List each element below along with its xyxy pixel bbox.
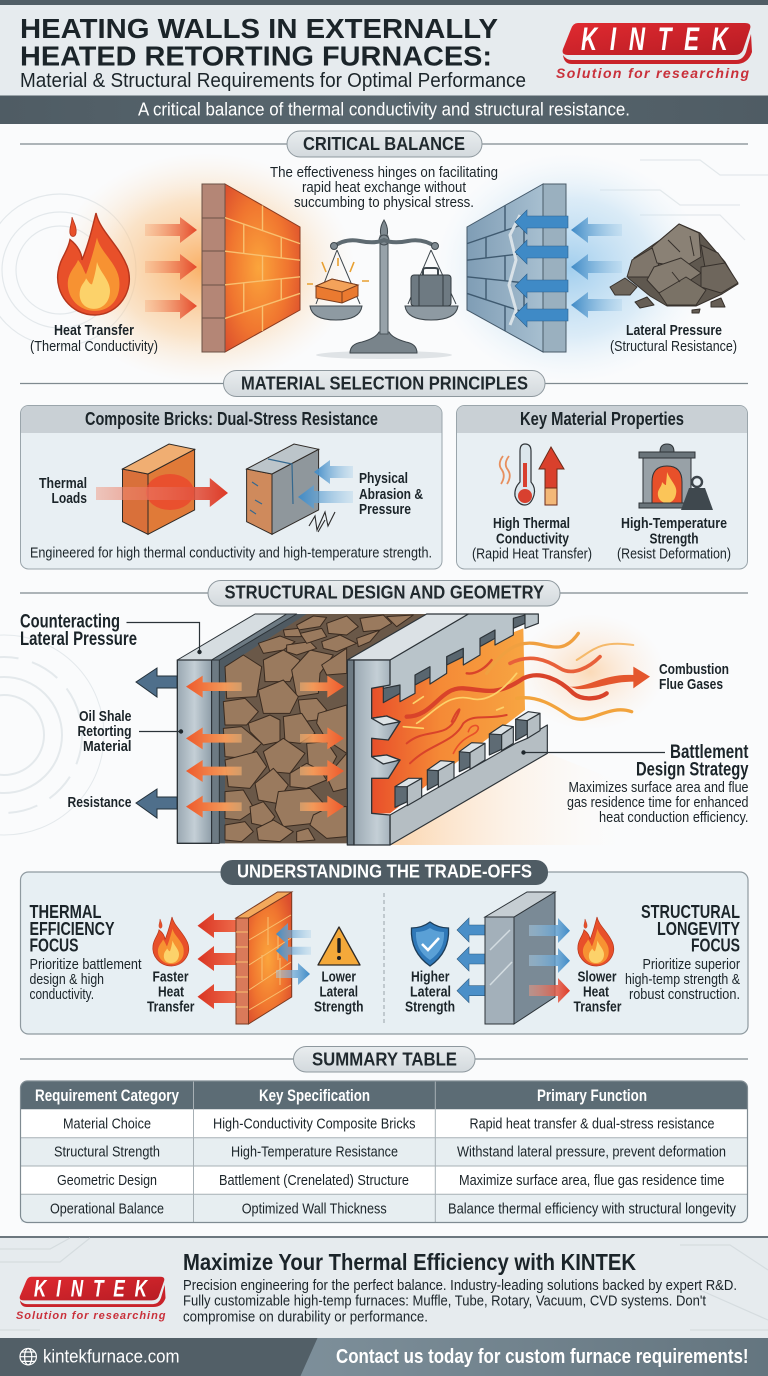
text: structural longevity focus	[625, 901, 741, 1003]
label: oil shale retorting material	[78, 708, 183, 755]
battlement wall: front face	[347, 660, 400, 845]
icon: flame	[153, 917, 189, 966]
label: thermal loads: Thermal	[39, 475, 87, 492]
heading: Key Material Properties	[520, 409, 684, 429]
section heading: structural design: STRUCTURAL DESIGN AND GEOMETRY	[224, 582, 545, 602]
weight case on pan	[411, 268, 451, 306]
label: higher lateral strength: Strength	[405, 998, 455, 1016]
title	[20, 13, 498, 72]
footer paragraph: Fully customizable high-temp furnaces: Muffle, Tube, Rotary, Vacuum, CVD systems. Don't	[183, 1293, 707, 1310]
text: thermal efficiency focus	[30, 901, 142, 1003]
label: lateral pressure	[610, 322, 737, 355]
bottom contact bar	[0, 1338, 768, 1376]
section heading: summary table: SUMMARY TABLE	[312, 1048, 457, 1070]
label: faster heat transfer: Heat	[158, 984, 184, 1000]
double arrows: lateral resistance	[186, 676, 344, 818]
label: lateral pressure: (Structural Resistance)	[610, 338, 737, 355]
label: thermal loads	[39, 475, 87, 507]
section heading: summary table	[20, 1046, 748, 1072]
label: heat transfer: (Thermal Conductivity)	[30, 338, 158, 355]
diagram: thin brick wall	[198, 892, 311, 1024]
panel: composite bricks	[20, 406, 442, 569]
section heading: critical balance: CRITICAL BALANCE	[303, 133, 465, 154]
decorative circuit background: top left	[0, 160, 768, 346]
table row: structural strength: Withstand lateral pressure, prevent deformation	[457, 1144, 726, 1161]
table row: operational balance	[50, 1200, 736, 1217]
label: higher lateral strength	[405, 968, 455, 1016]
arrows: pressure from rocks	[571, 217, 622, 318]
label: slower heat transfer: Heat	[583, 984, 609, 1000]
retort rock bed	[213, 614, 427, 843]
label: combustion flue gases	[659, 661, 729, 693]
table row: operational balance: Operational Balance	[50, 1200, 164, 1217]
label: thermal loads: Loads	[52, 490, 87, 507]
footer logo: KINTEK	[34, 1276, 149, 1302]
brick wall: hot side	[202, 184, 300, 352]
table header row: Key Specification	[259, 1087, 370, 1105]
icon: warning triangle	[318, 927, 360, 965]
label: high thermal conductivity: High Thermal	[493, 515, 570, 532]
intro text	[270, 164, 498, 211]
label: battlement design strategy: Battlement	[670, 742, 749, 763]
panel: structural design	[20, 612, 749, 845]
arrows: pressure in wall	[515, 210, 568, 327]
label: high temperature strength: Strength	[650, 530, 698, 548]
diagram: thick stone wall	[457, 892, 570, 1024]
section heading: material selection principles	[20, 370, 748, 396]
footer paragraph: compromise on durability or performance.	[183, 1308, 428, 1326]
label: faster heat transfer: Transfer	[147, 998, 195, 1016]
footer heading: Maximize Your Thermal Efficiency with KINTEK	[183, 1249, 636, 1275]
text: structural longevity focus: STRUCTURAL	[641, 901, 740, 922]
text: structural longevity focus: FOCUS	[691, 934, 740, 956]
panel: critical balance	[30, 153, 738, 383]
icon: shield	[411, 922, 449, 966]
table row: material choice: High-Conductivity Composite Bricks	[213, 1115, 416, 1132]
label: higher lateral strength: Lateral	[410, 984, 451, 1000]
label: oil shale retorting material: Retorting	[78, 723, 132, 740]
icon: thermometer and up arrow	[500, 444, 564, 505]
table header row: Primary Function	[537, 1087, 647, 1105]
heading pill: UNDERSTANDING THE TRADE-OFFS	[237, 860, 532, 882]
tagline band	[0, 96, 768, 124]
diagram: wall section	[177, 614, 650, 845]
heading: Composite Bricks: Dual-Stress Resistance	[85, 409, 378, 429]
section heading: critical balance	[20, 131, 748, 157]
label: slower heat transfer	[574, 968, 622, 1016]
top stripe	[0, 0, 768, 5]
intro text: rapid heat exchange without	[302, 179, 467, 196]
icon: flame	[58, 213, 129, 315]
icon: balance scale	[307, 220, 458, 359]
label: physical abrasion	[359, 470, 423, 518]
text: thermal efficiency focus: FOCUS	[30, 934, 78, 956]
battlement wall: upper crenels	[347, 614, 538, 703]
text: thermal efficiency focus: design & high	[30, 971, 104, 988]
label: high temperature strength: High-Temperature	[621, 515, 727, 532]
flue gas arrow	[570, 667, 650, 689]
label: heat transfer	[30, 322, 158, 355]
label: faster heat transfer	[147, 968, 195, 1016]
logo: KINTEK: Solution for researching	[556, 65, 749, 81]
footer logo	[16, 1276, 166, 1322]
icon: furnace and weight	[639, 444, 713, 510]
left wall	[177, 614, 297, 843]
label: combustion flue gases: Flue Gases	[659, 676, 723, 693]
table row: geometric design: Maximize surface area, flue gas residence time	[459, 1172, 724, 1189]
header	[0, 0, 768, 96]
section heading: material selection principles: MATERIAL SELECTION PRINCIPLES	[241, 372, 528, 394]
footer paragraph	[183, 1277, 737, 1326]
label: lower lateral strength	[314, 968, 364, 1016]
table header row	[35, 1087, 647, 1105]
label: high thermal conductivity: (Rapid Heat Transfer)	[472, 546, 592, 562]
table row: material choice: Material Choice	[63, 1115, 151, 1132]
battlement wall: flames	[403, 633, 633, 763]
text: thermal efficiency focus: EFFICIENCY	[30, 918, 115, 939]
icon: composite brick under pressure	[247, 444, 353, 534]
table row: material choice: Rapid heat transfer & dual-stress resistance	[470, 1115, 714, 1132]
label: lateral pressure: Lateral Pressure	[626, 322, 722, 339]
decorative circuit background: structural section	[0, 635, 104, 835]
label: combustion flue gases: Combustion	[659, 661, 729, 678]
icon: rock pile	[610, 224, 738, 313]
heat glow under wall	[390, 753, 640, 845]
label: high temperature strength: (Resist Deformation)	[617, 546, 731, 562]
label: lower lateral strength: Strength	[314, 998, 364, 1016]
logo: KINTEK: KINTEK	[581, 21, 730, 57]
label: physical abrasion: Pressure	[359, 501, 411, 518]
text: thermal efficiency focus: conductivity.	[30, 986, 94, 1003]
label: counteracting lateral pressure: Counteracting	[20, 612, 120, 632]
text: thermal efficiency focus: Prioritize battlement	[30, 956, 142, 973]
label: lower lateral strength: Lateral	[320, 984, 358, 1000]
label: faster heat transfer: Faster	[152, 968, 189, 986]
website: kintekfurnace.com	[43, 1347, 180, 1367]
title: HEATING WALLS IN EXTERNALLY	[20, 13, 498, 44]
table header row: Requirement Category	[35, 1087, 180, 1105]
caption: Engineered for high thermal conductivity and high-temperature strength.	[30, 544, 432, 562]
label: counteracting lateral pressure	[20, 612, 202, 654]
panel: key material properties	[456, 406, 748, 569]
label: counteracting lateral pressure: Lateral Pressure	[20, 629, 137, 650]
label: slower heat transfer: Transfer	[574, 998, 622, 1016]
label: resistance: Resistance	[68, 794, 132, 811]
icon: flame	[578, 917, 614, 966]
arrows: heat into wall	[145, 217, 197, 319]
subtitle: Material & Structural Requirements for Optimal Performance	[20, 69, 526, 92]
table row: material choice	[63, 1115, 714, 1132]
logo: KINTEK	[556, 21, 752, 81]
arrows: outward pressure	[136, 668, 177, 818]
table row: structural strength: Structural Strength	[54, 1144, 160, 1161]
section heading: structural design	[20, 580, 748, 606]
heat glow	[55, 153, 355, 383]
footer logo: Solution for researching	[16, 1310, 166, 1322]
battlement wall: fire chamber	[372, 628, 525, 813]
label: slower heat transfer: Slower	[578, 968, 617, 986]
text: structural longevity focus: robust construction.	[629, 986, 740, 1003]
label: high thermal conductivity: Conductivity	[496, 530, 570, 548]
title: HEATED RETORTING FURNACES:	[20, 40, 492, 72]
battlement wall: lower crenels	[390, 712, 547, 845]
tagline band: A critical balance of thermal conductivity and structural resistance.	[138, 98, 630, 120]
icon: brick with heat arrow	[96, 444, 228, 534]
label: oil shale retorting material: Material	[83, 738, 132, 755]
label: lower lateral strength: Lower	[322, 968, 356, 986]
footer call to action	[0, 1236, 768, 1338]
text: structural longevity focus: Prioritize superior	[642, 956, 740, 973]
table row: geometric design	[57, 1172, 724, 1189]
label: higher lateral strength: Higher	[411, 968, 450, 986]
stone wall: pressure side	[467, 184, 566, 352]
intro text: succumbing to physical stress.	[294, 194, 474, 211]
label: heat transfer: Heat Transfer	[54, 322, 134, 339]
table row: operational balance: Optimized Wall Thickness	[242, 1200, 387, 1217]
text: structural longevity focus: high-temp strength &	[625, 971, 740, 988]
icon: globe	[20, 1348, 36, 1365]
label: battlement design strategy	[521, 742, 749, 826]
intro text: The effectiveness hinges on facilitating	[270, 164, 498, 181]
text: structural longevity focus: LONGEVITY	[657, 918, 741, 939]
footer circuit decoration	[0, 1238, 768, 1330]
label: physical abrasion: Abrasion &	[359, 486, 423, 503]
table row: structural strength: High-Temperature Resistance	[231, 1144, 398, 1161]
table row: geometric design: Geometric Design	[57, 1172, 157, 1189]
label: high thermal conductivity	[472, 515, 592, 562]
cold glow	[435, 153, 705, 383]
panel: trade-offs	[20, 860, 748, 1034]
brick on pan	[307, 258, 369, 303]
table row: geometric design: Battlement (Crenelated) Structure	[219, 1172, 409, 1189]
label: oil shale retorting material: Oil Shale	[79, 708, 132, 725]
flue glow	[515, 614, 665, 730]
table row: structural strength	[54, 1144, 726, 1161]
text: thermal efficiency focus: THERMAL	[30, 901, 102, 922]
summary table	[20, 1081, 748, 1222]
label: high temperature strength	[617, 515, 731, 562]
label: physical abrasion: Physical	[359, 470, 408, 487]
